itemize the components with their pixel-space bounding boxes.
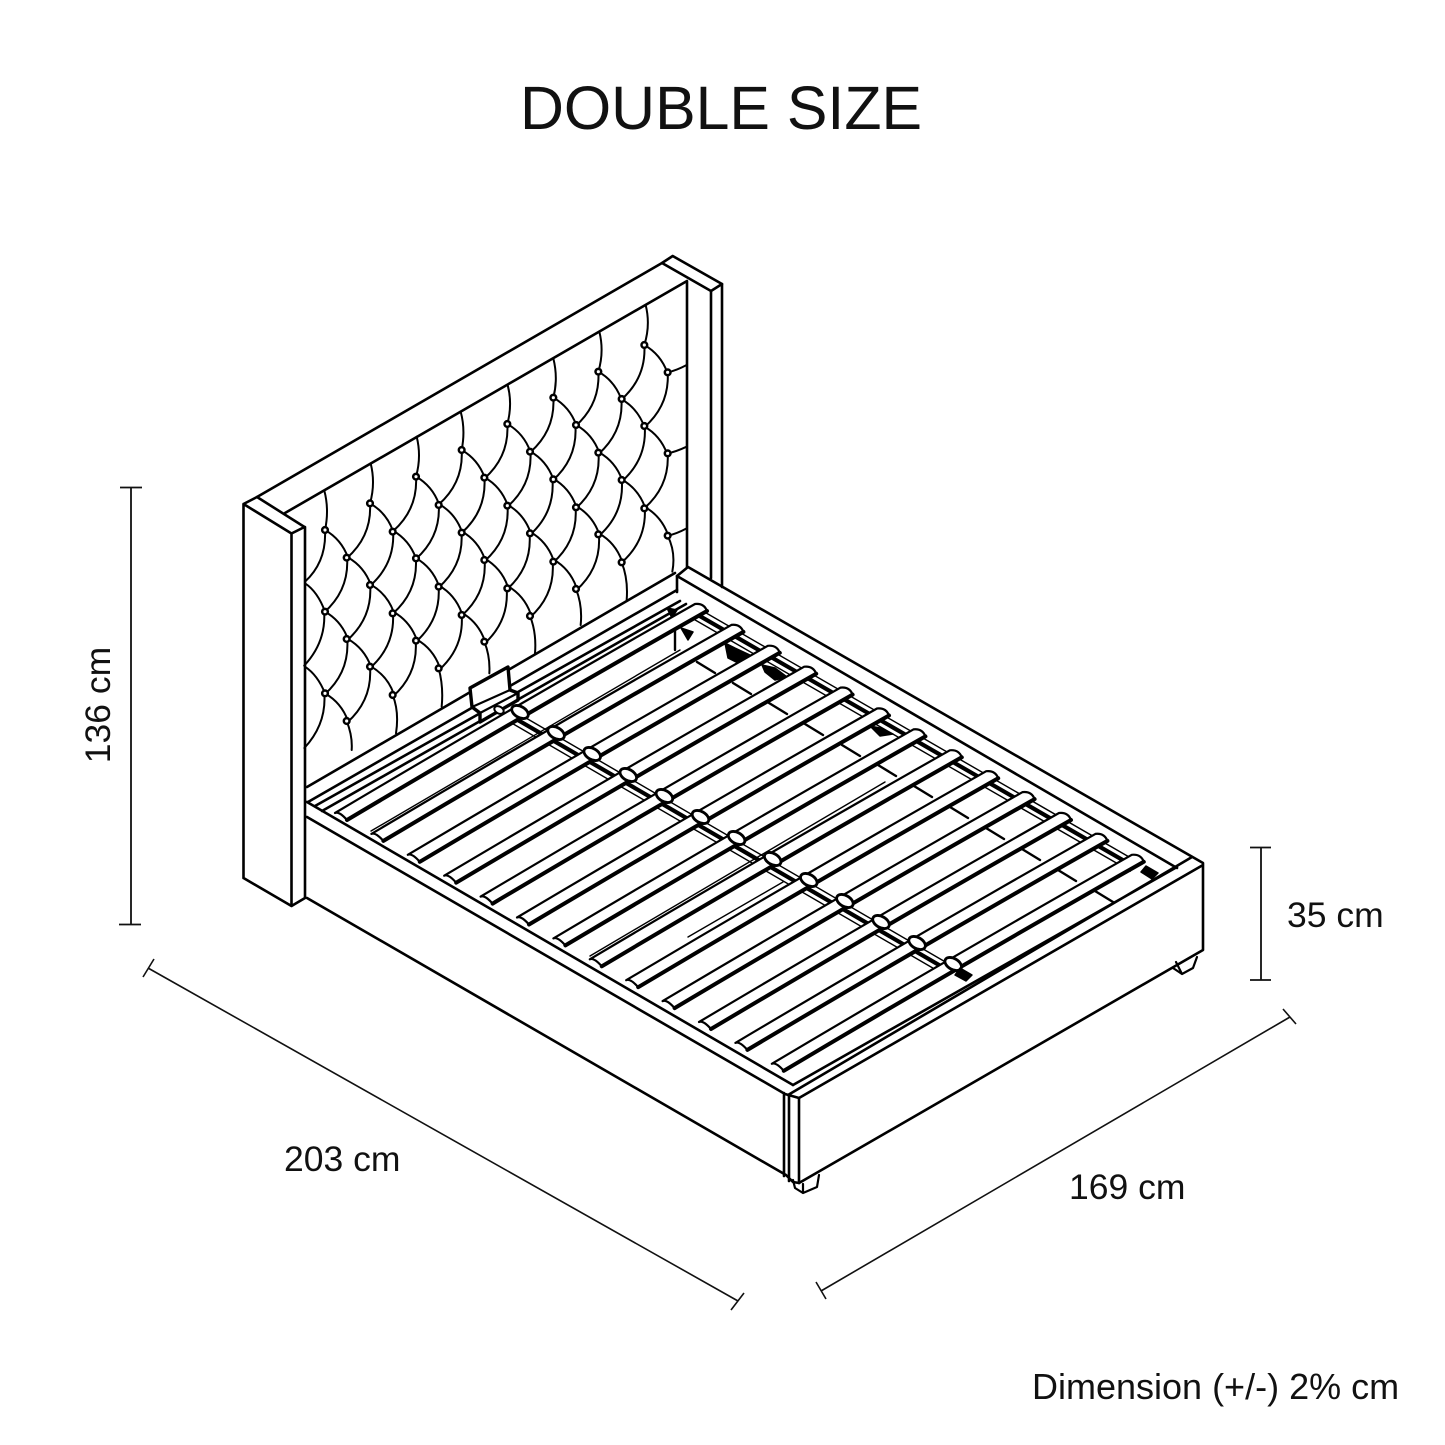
gas strut lines	[371, 650, 885, 956]
right side support strap and mechanism details	[667, 608, 1136, 902]
headboard outline and wings	[244, 256, 722, 906]
dimension: base height 35 cm	[1250, 847, 1271, 980]
bed diagram	[244, 256, 1203, 1193]
bed slats	[335, 604, 1144, 1071]
dimension: width 169 cm	[816, 1009, 1296, 1299]
label 136 cm: 136 cm	[78, 647, 118, 763]
lift handle bracket	[470, 667, 518, 722]
strap end fittings	[955, 866, 1158, 981]
tufted headboard pattern	[304, 305, 687, 750]
dimension: length 203 cm	[143, 959, 744, 1310]
title: DOUBLE SIZE	[520, 74, 922, 142]
bed feet	[793, 957, 1197, 1193]
tolerance note: Dimension (+/-) 2% cm	[1032, 1366, 1399, 1407]
dimension: height 136 cm	[119, 487, 142, 924]
bed base frame	[307, 567, 1203, 1183]
label 203 cm: 203 cm	[284, 1139, 400, 1179]
strap ovals	[509, 703, 964, 973]
label 169 cm: 169 cm	[1069, 1167, 1185, 1207]
tufting buttons	[322, 342, 670, 724]
label 35 cm: 35 cm	[1287, 895, 1384, 935]
central strap	[514, 716, 951, 974]
